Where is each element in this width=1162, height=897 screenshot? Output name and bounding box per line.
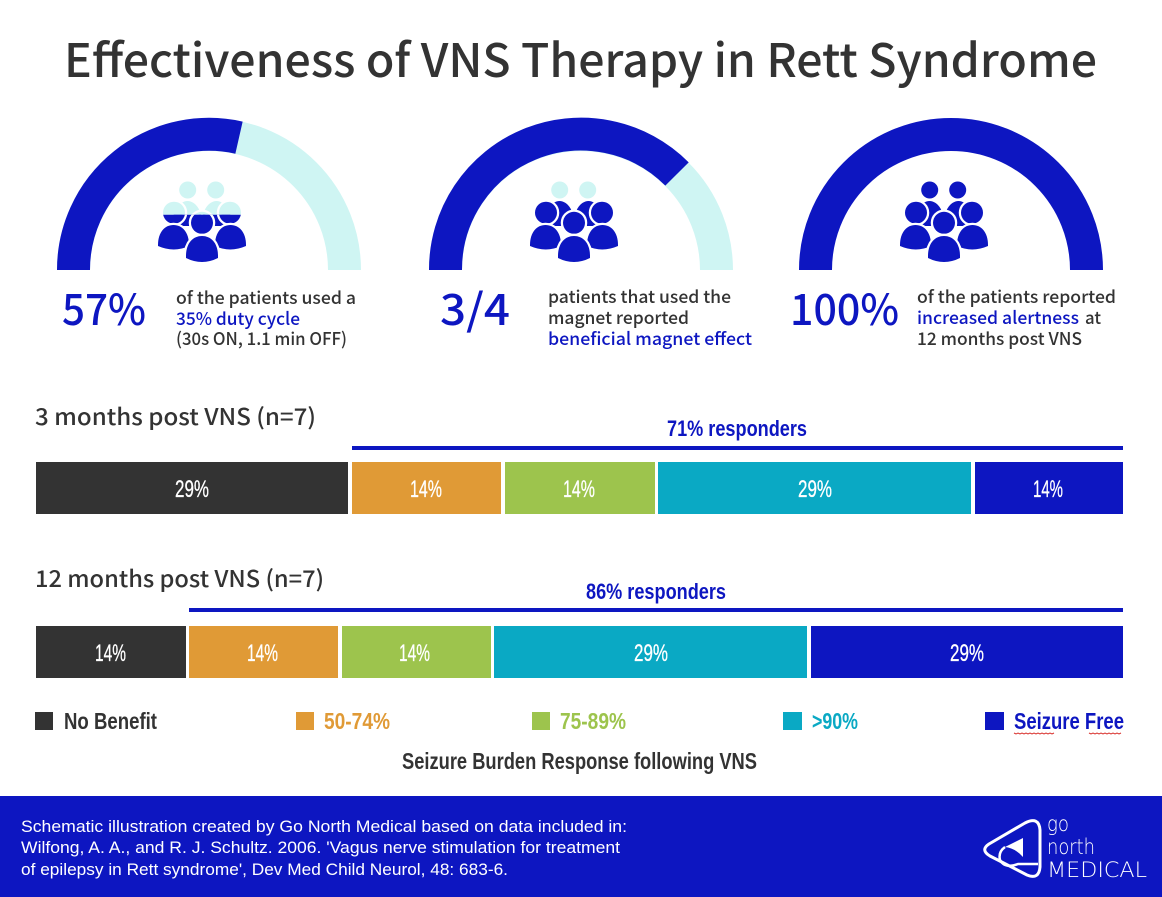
description: beneficial magnet effect: [548, 326, 752, 351]
description: [548, 284, 752, 351]
icon: people group, partly filled: [158, 182, 246, 262]
heading: 12 months: 12 months post VNS (n=7): [35, 560, 324, 594]
responders bracket: 71%: [352, 416, 1123, 450]
responders bracket: 71%: 71% responders: [667, 416, 807, 441]
logo: Go North Medical: MEDICAL: [1047, 858, 1147, 882]
responders bracket: 86%: 86% responders: [586, 579, 726, 604]
citation: [21, 818, 627, 879]
citation: Wilfong, A. A., and R. J. Schultz. 2006. 'Vagus nerve stimulation for treatment: [21, 839, 620, 857]
stacked bar: 3 months: 14%: [1033, 476, 1063, 503]
description: [176, 285, 356, 351]
stacked bar: 3 months: 14%: [563, 476, 595, 503]
stacked bar: 3 months: 29%: [175, 476, 209, 503]
legend: No Benefit: [64, 708, 157, 734]
description: 35% duty cycle: [176, 306, 300, 331]
description: increased alertness: [917, 305, 1079, 330]
legend: [35, 708, 1124, 734]
description: patients that used the: [548, 284, 731, 309]
stacked bar: 12 months: 14%: [399, 640, 430, 667]
description: of the patients reported: [917, 284, 1116, 309]
panel: 100% alertness: [790, 135, 1116, 351]
stacked bar: 12 months: 29%: [634, 640, 668, 667]
panel: 3/4 magnet: [440, 134, 752, 351]
gauge: 3/4: [445, 134, 716, 270]
panel: 57% duty cycle: [62, 134, 356, 351]
icon: people group, fully filled: [900, 182, 988, 262]
legend: 75-89%: [560, 708, 626, 734]
legend: Seizure Free: [1014, 708, 1124, 734]
description: 12 months post VNS: [917, 326, 1082, 351]
footer band: [0, 796, 1162, 897]
stacked bar: 12 months: 29%: [950, 640, 984, 667]
heading: 3 months: 3 months post VNS (n=7): [35, 398, 316, 432]
legend: 50-74%: [324, 708, 390, 734]
icon: people group, mostly filled: [530, 182, 618, 262]
gauge: 57%: [73, 134, 344, 270]
stacked bar: 3 months: 14%: [410, 476, 442, 503]
title: Effectiveness of VNS Therapy in Rett Syndrome: [64, 25, 1097, 91]
description: of the patients used a: [176, 285, 356, 310]
description: at: [1085, 305, 1101, 330]
logo: Go North Medical: north: [1047, 835, 1095, 859]
logo: Go North Medical: [985, 812, 1147, 882]
gauge: 100%: [816, 135, 1086, 270]
big stat: 100%: [790, 276, 899, 338]
description: (30s ON, 1.1 min OFF): [176, 326, 347, 351]
description: magnet reported: [548, 305, 689, 330]
stacked bar: 3 months: 29%: [798, 476, 832, 503]
stacked bar: 3 months: [36, 462, 1123, 514]
stacked bar: 12 months: [36, 626, 1123, 678]
responders bracket: 86%: [189, 579, 1123, 612]
stacked bar: 12 months: 14%: [247, 640, 278, 667]
big stat: 3/4: [440, 276, 510, 338]
legend: >90%: [812, 708, 858, 734]
citation: Schematic illustration created by Go North Medical based on data included in:: [21, 818, 627, 836]
logo: Go North Medical: go: [1047, 812, 1069, 836]
legend caption: Seizure Burden Response following VNS: [402, 748, 757, 774]
citation: of epilepsy in Rett syndrome', Dev Med Child Neurol, 48: 683-6.: [21, 861, 508, 879]
stacked bar: 12 months: 14%: [95, 640, 126, 667]
big stat: 57%: [62, 276, 146, 338]
description: [917, 284, 1116, 351]
